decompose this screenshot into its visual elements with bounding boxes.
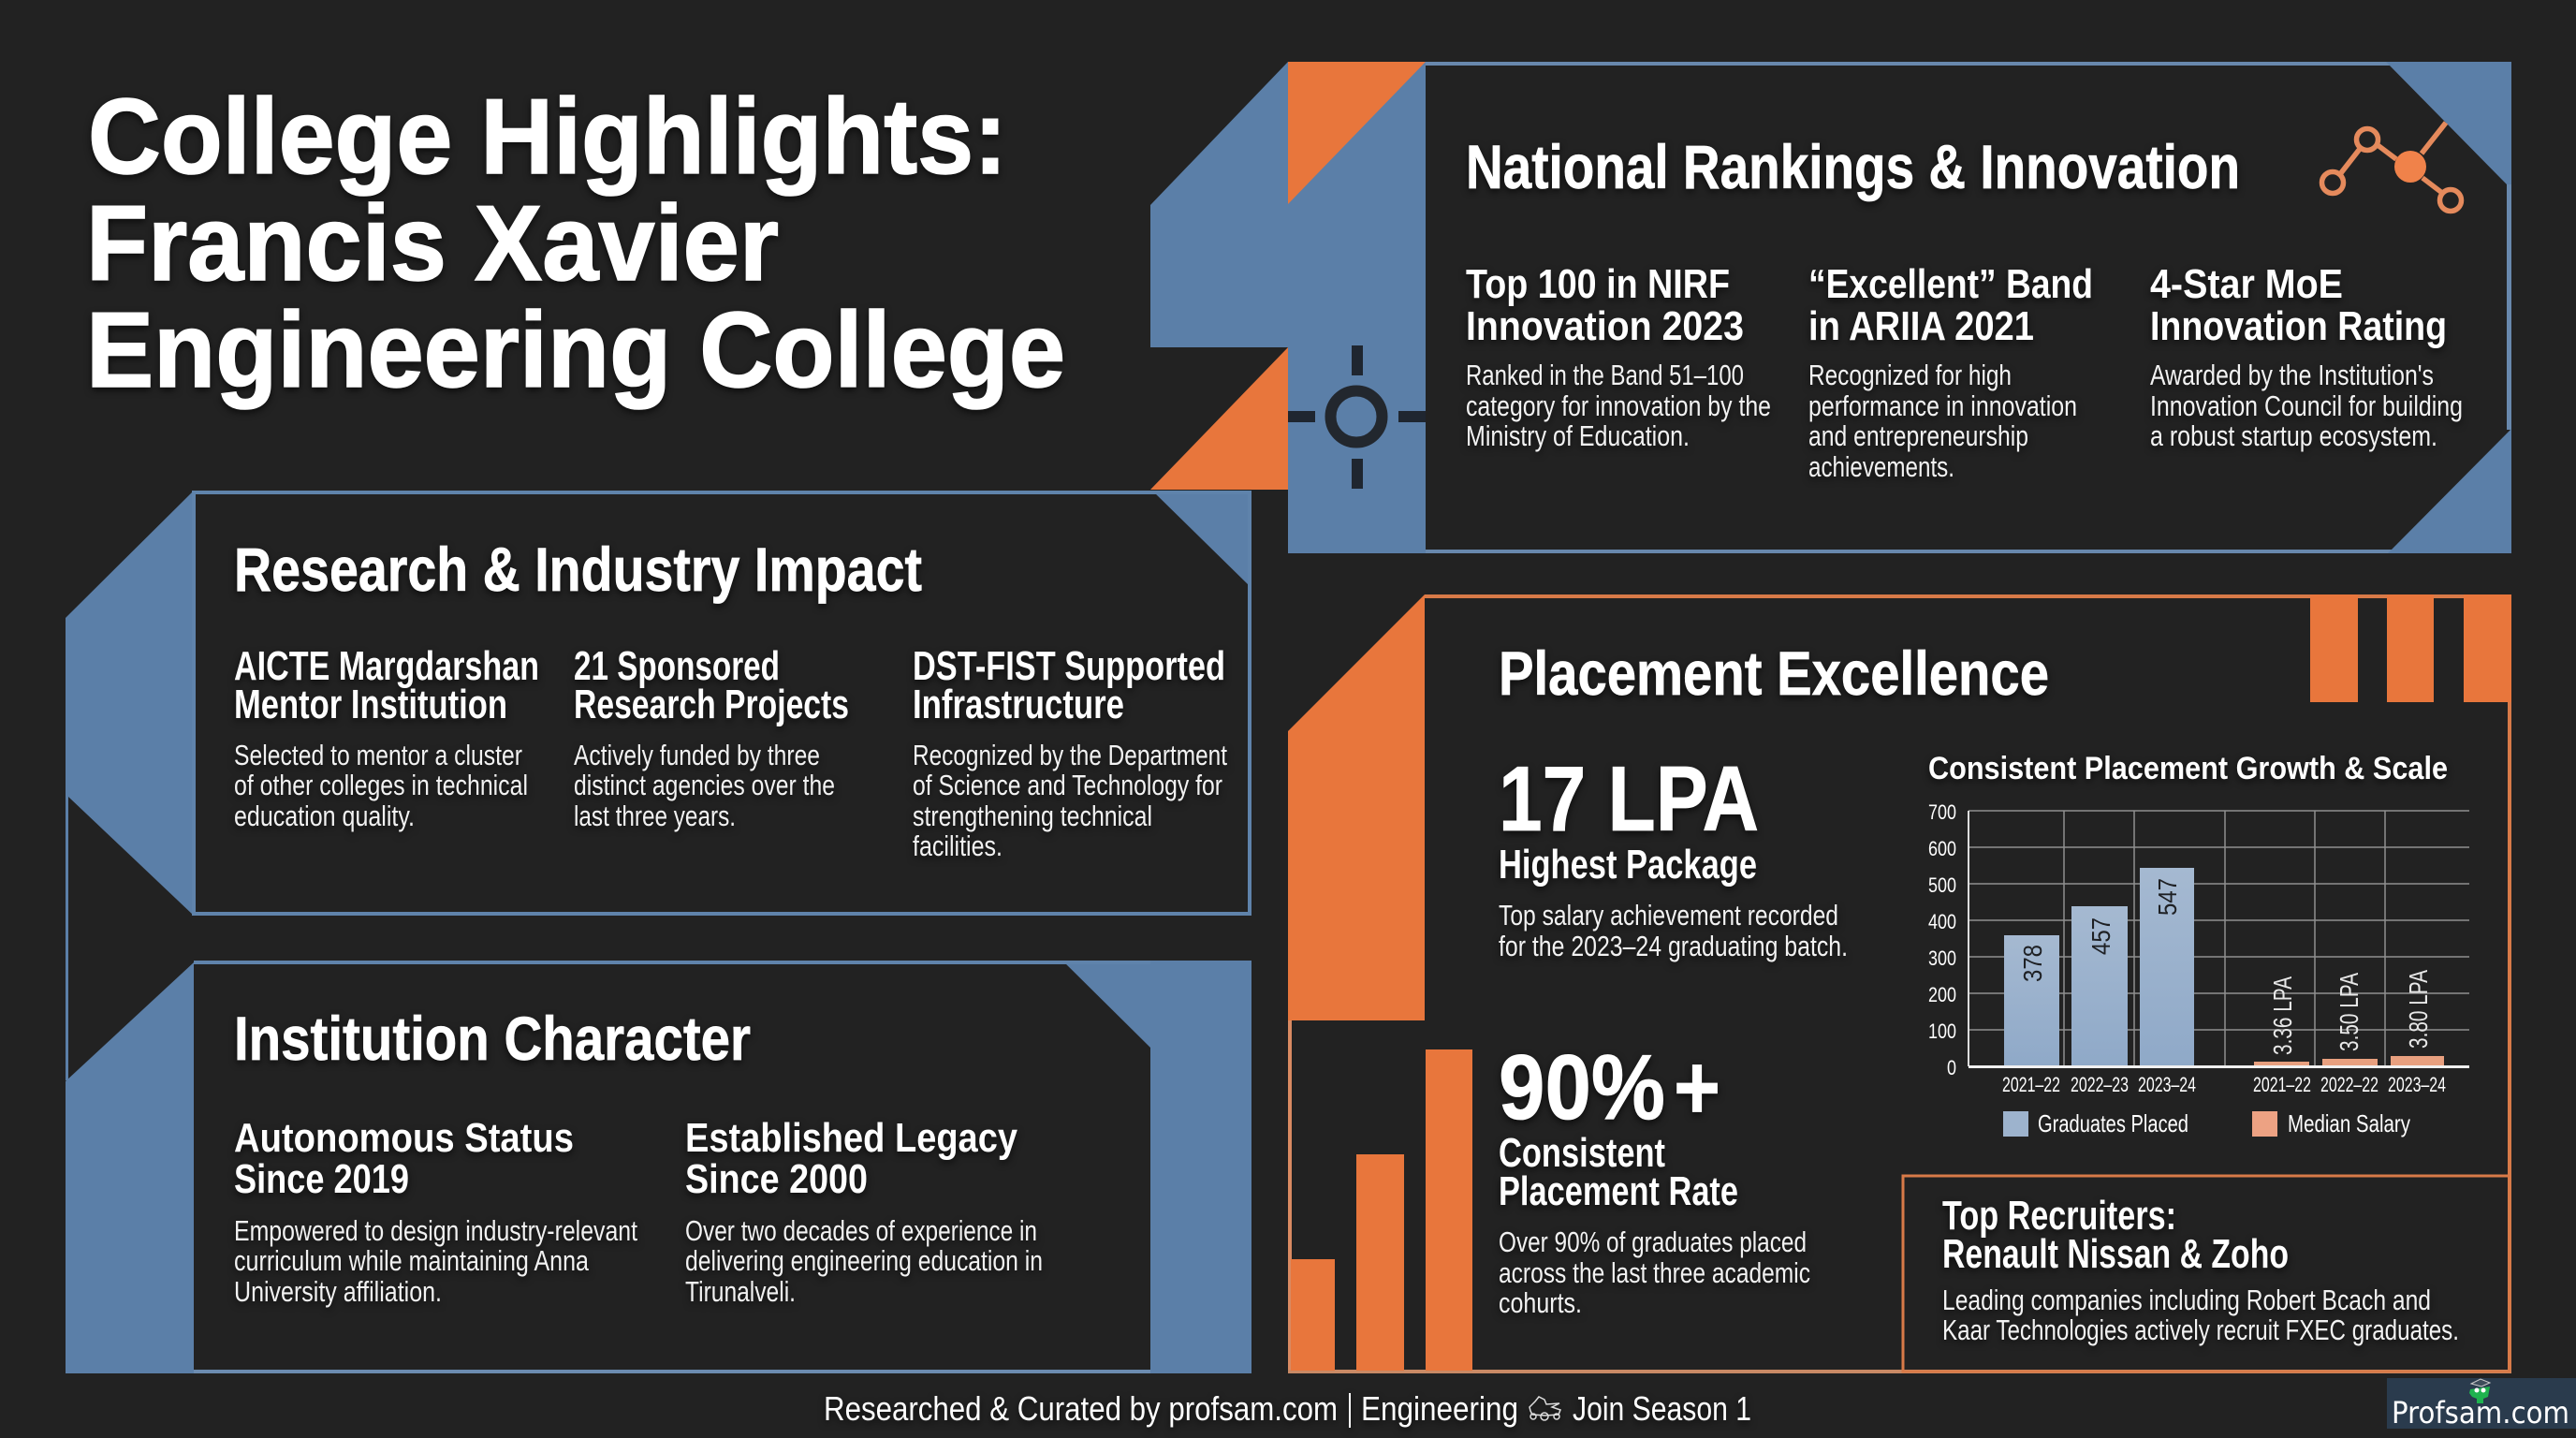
item: sponsored projects: distinct agencies over the — [574, 769, 835, 801]
item: AICTE Margdarshan: Selected to mentor a cluster — [234, 739, 522, 771]
stat: placement rate: 90% — [1499, 1035, 1665, 1138]
item: AICTE Margdarshan: Mentor Institution — [234, 682, 507, 727]
heading: national rankings: National Rankings & Innovation — [1466, 132, 2240, 201]
item: MoE rating: Innovation Rating — [2150, 303, 2447, 349]
heading: research: Research & Industry Impact — [234, 535, 922, 604]
panel: national rankings and innovation — [1150, 62, 2511, 553]
x axis labels: 2022–22 — [2320, 1073, 2378, 1096]
item: sponsored projects: last three years. — [574, 800, 736, 832]
bars: median salary: 3.50 LPA — [2334, 973, 2364, 1051]
bars: median salary: 3.36 LPA — [2268, 976, 2297, 1055]
item: NIRF: Ministry of Education. — [1466, 419, 1690, 452]
y axis labels — [1928, 800, 1956, 1079]
stat: placement rate — [1499, 1035, 1810, 1319]
item: DST-FIST: of Science and Technology for — [913, 769, 1222, 801]
item: DST-FIST — [913, 643, 1227, 862]
item: ARIIA: performance in innovation — [1808, 389, 2077, 422]
item: DST-FIST: Recognized by the Department — [913, 739, 1227, 771]
bars: median salary: 3.80 LPA — [2404, 970, 2433, 1049]
icon: green mascot — [2469, 1379, 2490, 1403]
item: sponsored projects: Research Projects — [574, 682, 849, 727]
item: autonomous status: Autonomous Status — [234, 1115, 574, 1161]
footer credit — [824, 1389, 1751, 1428]
y axis labels: 500 — [1928, 873, 1956, 897]
callout: top recruiters: Leading companies including Robert Bcach and — [1942, 1284, 2431, 1316]
stat: placement rate: across the last three academic — [1499, 1256, 1810, 1289]
y axis labels: 700 — [1928, 800, 1956, 824]
stat: highest package: Top salary achievement recorded — [1499, 899, 1838, 932]
item: MoE rating: 4-Star MoE — [2150, 261, 2343, 307]
logo: Profsam.com — [2387, 1378, 2576, 1431]
x axis labels: 2023–24 — [2138, 1073, 2196, 1096]
footer credit: Researched & Curated by profsam.com — [824, 1389, 1338, 1428]
title — [86, 78, 1065, 410]
bars: graduates placed: 457 — [2086, 917, 2115, 955]
footer credit: Engineering — [1361, 1389, 1518, 1428]
item: MoE rating: a robust startup ecosystem. — [2150, 419, 2437, 452]
heading: institution: Institution Character — [234, 1004, 751, 1073]
item: AICTE Margdarshan — [234, 643, 539, 832]
item: established legacy: Over two decades of experience in — [685, 1214, 1037, 1247]
y axis labels: 200 — [1928, 983, 1956, 1006]
item: sponsored projects: 21 Sponsored — [574, 643, 780, 689]
stat: highest package: 17 LPA — [1499, 747, 1759, 850]
item: ARIIA: “Excellent” Band — [1808, 261, 2093, 307]
item: NIRF: Top 100 in NIRF — [1466, 261, 1730, 307]
stat: highest package: for the 2023–24 graduating batch. — [1499, 930, 1848, 962]
callout: top recruiters: Top Recruiters: — [1942, 1193, 2176, 1239]
item: ARIIA: Recognized for high — [1808, 359, 2012, 391]
stat: placement rate: Placement Rate — [1499, 1168, 1738, 1214]
stat: highest package: Highest Package — [1499, 842, 1757, 888]
item: DST-FIST: Infrastructure — [913, 682, 1124, 727]
legend: Median Salary — [2288, 1109, 2410, 1137]
item: DST-FIST: strengthening technical — [913, 800, 1152, 832]
legend: Graduates Placed — [2038, 1109, 2188, 1137]
bars: median salary — [2254, 970, 2444, 1066]
x axis labels: 2021–22 — [2002, 1073, 2060, 1096]
stat: placement rate: cohurts. — [1499, 1286, 1582, 1319]
panel: institution character — [66, 961, 1251, 1373]
panel: research and industry impact — [66, 491, 1251, 1080]
item: established legacy: Since 2000 — [685, 1156, 868, 1202]
x axis labels: 2023–24 — [2388, 1073, 2446, 1096]
callout: top recruiters — [1903, 1176, 2510, 1372]
item: sponsored projects — [574, 643, 849, 832]
item: established legacy: Tirunalveli. — [685, 1275, 796, 1308]
icon: target crosshair — [1288, 345, 1426, 489]
item: established legacy: Established Legacy — [685, 1115, 1017, 1161]
item: AICTE Margdarshan: education quality. — [234, 800, 415, 832]
x axis labels: 2021–22 — [2253, 1073, 2311, 1096]
heading: placement: Placement Excellence — [1499, 638, 2049, 708]
item: autonomous status: Empowered to design industry-relevant — [234, 1214, 637, 1247]
item: MoE rating: Awarded by the Institution's — [2150, 359, 2434, 391]
item: NIRF: Ranked in the Band 51–100 — [1466, 359, 1744, 391]
item: DST-FIST: DST-FIST Supported — [913, 643, 1225, 689]
item: ARIIA: in ARIIA 2021 — [1808, 303, 2034, 349]
item: AICTE Margdarshan: of other colleges in technical — [234, 769, 528, 801]
item: ARIIA — [1808, 261, 2093, 483]
stat: highest package — [1499, 747, 1848, 962]
footer credit: Join Season 1 — [1573, 1389, 1751, 1428]
item: autonomous status — [234, 1115, 637, 1308]
item: NIRF: Innovation 2023 — [1466, 303, 1744, 349]
item: autonomous status: curriculum while maintaining Anna — [234, 1244, 590, 1277]
bars: graduates placed: 547 — [2153, 878, 2182, 916]
item: DST-FIST: facilities. — [913, 829, 1003, 862]
stat: placement rate: Over 90% of graduates placed — [1499, 1225, 1807, 1258]
stat: placement rate: Consistent — [1499, 1130, 1665, 1176]
title: Francis Xavier — [86, 184, 779, 303]
title: Engineering College — [86, 291, 1065, 410]
item: NIRF: category for innovation by the — [1466, 389, 1771, 422]
bars: graduates placed: 378 — [2018, 945, 2047, 982]
x axis labels: 2022–23 — [2071, 1073, 2129, 1096]
title: College Highlights: — [88, 78, 1007, 197]
y axis labels: 600 — [1928, 837, 1956, 860]
x axis labels — [2002, 1073, 2446, 1096]
chart title: Consistent Placement Growth & Scale — [1928, 751, 2448, 786]
stat: placement rate: + — [1674, 1035, 1720, 1138]
item: autonomous status: University affiliation. — [234, 1275, 442, 1308]
bars: graduates placed — [2004, 868, 2194, 1066]
chart: placement growth and scale — [1928, 751, 2469, 1137]
legend — [2003, 1109, 2410, 1137]
item: MoE rating: Innovation Council for building — [2150, 389, 2463, 422]
panel: placement excellence — [1288, 594, 2511, 1373]
item: established legacy: delivering engineering education in — [685, 1244, 1043, 1277]
callout: top recruiters: Renault Nissan & Zoho — [1942, 1231, 2289, 1277]
item: autonomous status: Since 2019 — [234, 1156, 409, 1202]
item: ARIIA: achievements. — [1808, 450, 1954, 483]
icon: network nodes — [2321, 123, 2462, 212]
y axis labels: 100 — [1928, 1020, 1956, 1043]
item: sponsored projects: Actively funded by three — [574, 739, 820, 771]
y axis labels: 300 — [1928, 946, 1956, 970]
item: AICTE Margdarshan: AICTE Margdarshan — [234, 643, 539, 689]
y axis labels: 0 — [1947, 1056, 1956, 1079]
item: MoE rating — [2150, 261, 2463, 452]
y axis labels: 400 — [1928, 910, 1956, 933]
item: NIRF — [1466, 261, 1771, 452]
item: established legacy — [685, 1115, 1043, 1308]
item: ARIIA: and entrepreneurship — [1808, 419, 2028, 452]
